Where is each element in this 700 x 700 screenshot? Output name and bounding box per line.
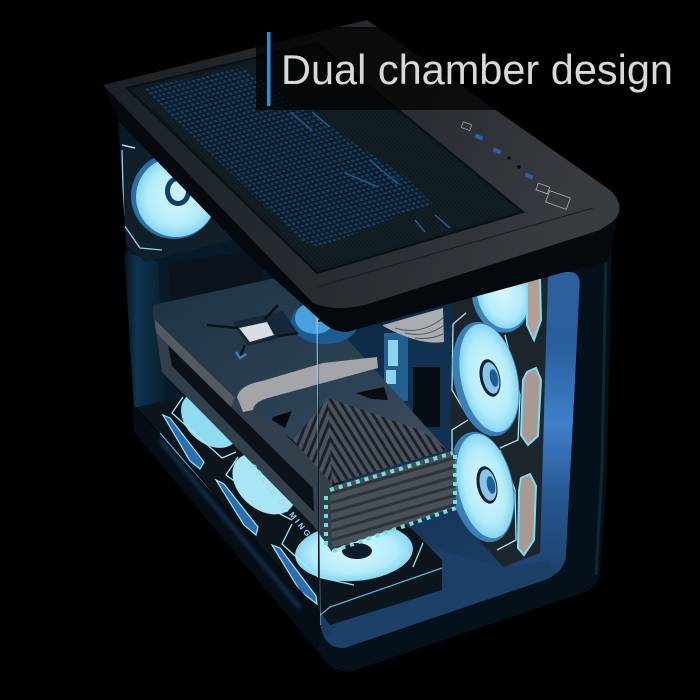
panel: top cover bbox=[103, 20, 620, 332]
icon: middle right fan bbox=[452, 322, 520, 436]
water block fan ring bbox=[291, 300, 359, 344]
panel: right fan plate bbox=[450, 276, 548, 567]
CPU socket bbox=[207, 305, 298, 358]
internal light streaks bbox=[290, 112, 450, 232]
panel: graphics card bbox=[153, 277, 456, 552]
cable bundle bbox=[383, 308, 444, 343]
PCIe slot cover bbox=[168, 250, 262, 305]
glowing tray edge strips bbox=[163, 415, 317, 604]
panel: lower left frame bbox=[133, 405, 320, 652]
title: Dual chamber design bbox=[281, 46, 673, 93]
graphics card top bbox=[153, 277, 447, 484]
panel: left chamber interior bbox=[118, 120, 301, 584]
icon: top right fan bbox=[472, 282, 526, 333]
frame highlight bbox=[596, 250, 606, 575]
icon: bottom fan 3 bbox=[282, 519, 415, 585]
heatsink front bbox=[330, 450, 456, 550]
ribbed mesh bbox=[293, 398, 447, 484]
rear glow strip bbox=[510, 272, 580, 575]
top mesh base bbox=[127, 43, 523, 273]
white cable loop bbox=[237, 357, 378, 412]
glass edge bbox=[317, 317, 320, 625]
icon: lower right fan bbox=[453, 432, 514, 542]
fan plate connector strips bbox=[518, 278, 541, 555]
fine mesh bbox=[133, 48, 516, 268]
front I/O ports bbox=[461, 122, 570, 209]
panel: graphics card: SPACE GAMING bbox=[248, 463, 312, 538]
infographic scene bbox=[103, 20, 670, 672]
icon: bottom fan 1 bbox=[170, 381, 250, 459]
graphics card side bbox=[153, 312, 332, 552]
panel: right chamber interior bbox=[318, 252, 588, 655]
dark cut-outs bbox=[272, 411, 292, 428]
panel: bottom fan tray bbox=[137, 381, 442, 625]
title accent bar bbox=[267, 32, 270, 106]
top cover rim bbox=[103, 85, 620, 332]
title banner backdrop bbox=[256, 27, 700, 110]
blue perforation area bbox=[143, 68, 433, 248]
floor bbox=[326, 548, 552, 648]
motherboard bbox=[384, 333, 440, 427]
panel: right side frame bbox=[318, 228, 612, 672]
top cover surface bbox=[103, 20, 620, 308]
LED edges bbox=[326, 453, 456, 551]
icon: left side fan bbox=[121, 144, 212, 262]
icon: bottom fan 2 bbox=[221, 441, 307, 527]
cover crease bbox=[317, 208, 593, 287]
